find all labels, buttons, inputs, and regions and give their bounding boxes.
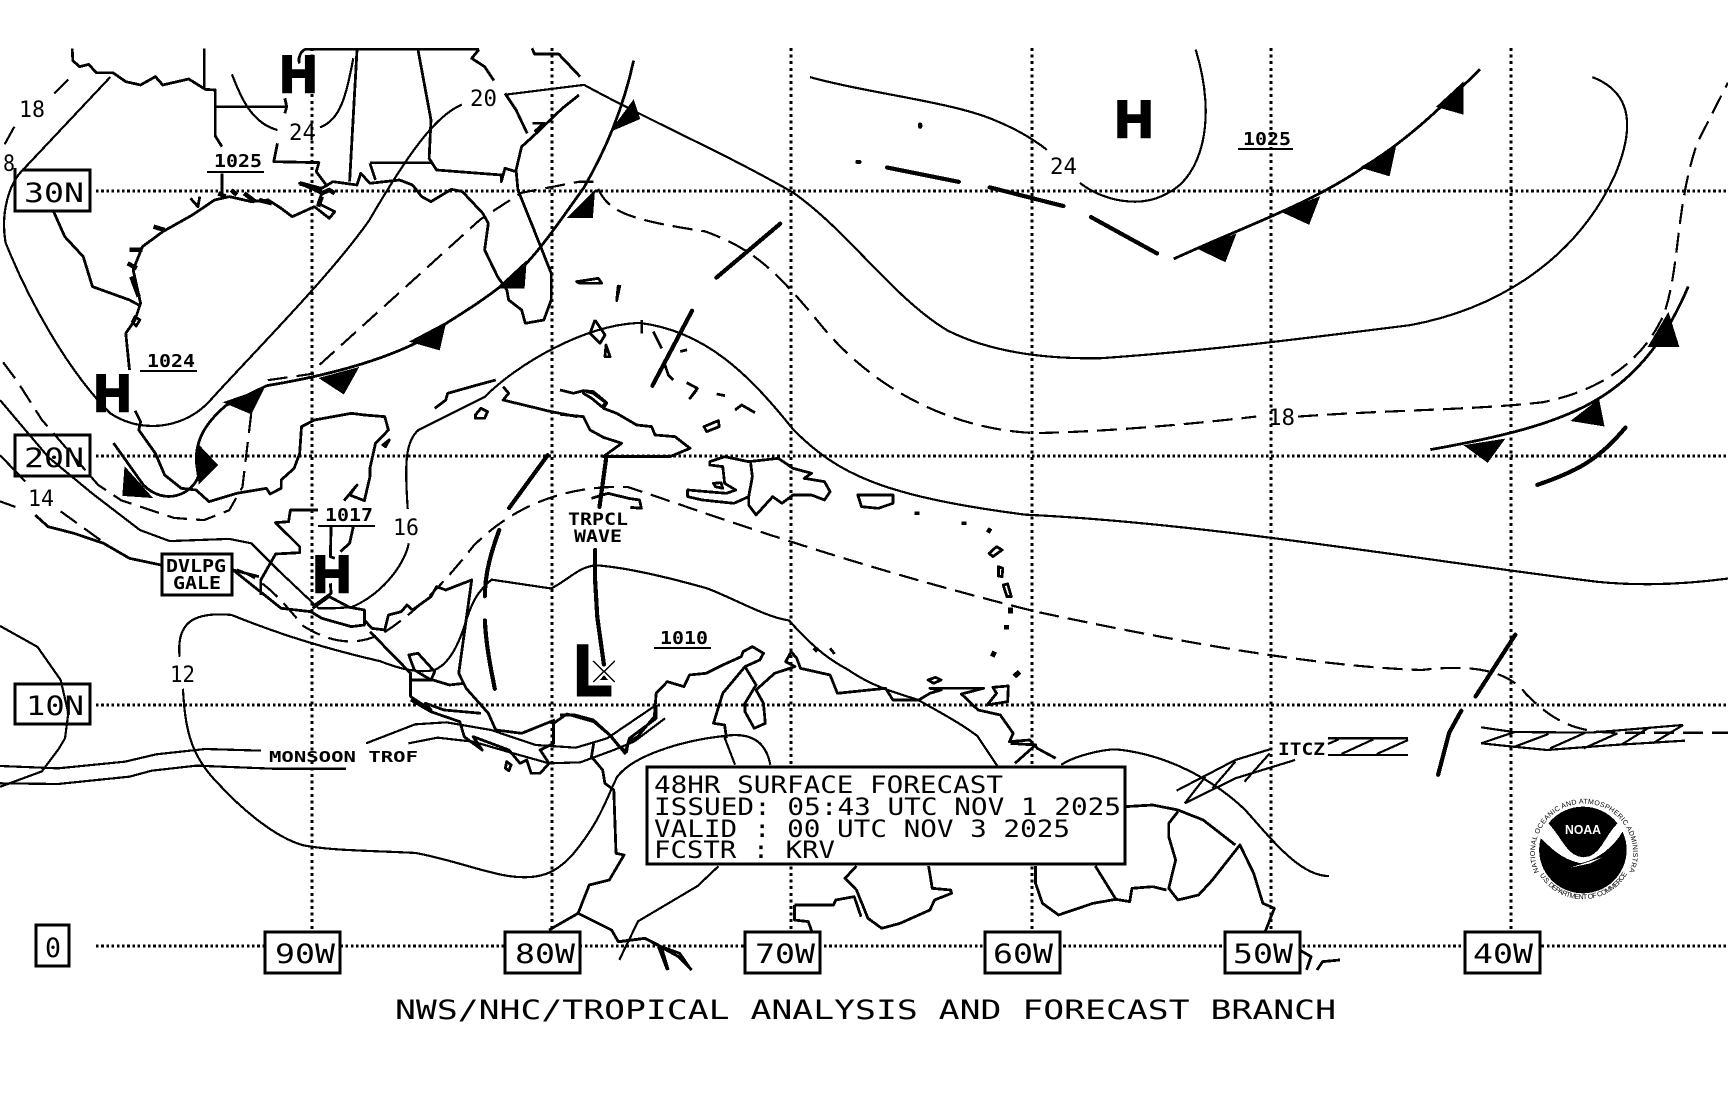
forecast info box: ISSUED: 05:43 UTC NOV 1 2025 <box>654 793 1121 821</box>
longitude labels: 80W <box>515 939 576 970</box>
cold front west <box>114 61 640 498</box>
isobar 18 dashed <box>0 79 1728 520</box>
tropical wave label <box>568 510 628 547</box>
forecast info box: VALID : 00 UTC NOV 3 2025 <box>654 815 1070 843</box>
longitude labels: 50W <box>1233 939 1294 970</box>
pressure values: 1025 <box>214 152 262 172</box>
tropical wave axis <box>595 458 606 665</box>
pressure values: 1017 <box>325 506 373 526</box>
itcz hatching <box>1177 725 1685 803</box>
isobar values: 14 <box>28 487 54 512</box>
longitude labels: 70W <box>755 939 816 970</box>
dvlpg gale box: GALE <box>173 574 221 594</box>
isobar values: 20 <box>470 87 497 112</box>
tropical wave label: TRPCL <box>568 510 628 530</box>
itcz label: ITCZ <box>1278 740 1325 760</box>
latitude labels: 20N <box>24 443 84 474</box>
longitude labels: 90W <box>275 939 336 970</box>
isobar values: 16 <box>393 516 419 541</box>
forecast info box <box>647 767 1125 864</box>
latitude and longitude grid <box>96 48 1728 946</box>
isobar 12 <box>0 565 1329 960</box>
longitude labels <box>265 932 1540 973</box>
pressure values: 1010 <box>660 629 708 649</box>
isobar 16 <box>0 323 1728 608</box>
longitude labels: 60W <box>993 939 1054 970</box>
south america <box>620 743 1340 970</box>
isobar values <box>3 87 1295 688</box>
tropical wave label: WAVE <box>574 527 622 547</box>
coastlines and political borders <box>35 48 1340 970</box>
isobar values: 24 <box>1050 155 1077 180</box>
feature labels <box>162 510 1325 766</box>
isobar values: 12 <box>170 663 195 688</box>
high pressure centers: H <box>280 46 317 104</box>
isobar 24 east <box>810 50 1206 202</box>
mexico and central america <box>35 380 577 733</box>
isobar values: 24 <box>289 121 316 146</box>
noaa logo: U.S. DEPARTMENT OF COMMERCE <box>1540 872 1627 900</box>
latitude labels: 30N <box>24 178 84 209</box>
pressure values: 1024 <box>147 352 195 372</box>
panama colombia coast <box>411 700 692 970</box>
noaa logo <box>1530 798 1638 900</box>
pressure values <box>140 130 1293 649</box>
pressure values: 1025 <box>1243 130 1291 150</box>
latitude labels: 0 <box>45 933 61 964</box>
surface troughs <box>485 125 1515 775</box>
dvlpg gale box: DVLPG <box>166 557 226 577</box>
isobar values: 8 <box>3 152 15 177</box>
high pressure centers: H <box>1115 91 1153 149</box>
monsoon trough lines <box>0 705 665 784</box>
high pressure centers: H <box>313 546 351 604</box>
latitude labels <box>15 168 90 966</box>
high pressure centers: H <box>94 365 131 423</box>
cuba bahamas and small islands <box>560 278 755 457</box>
isobar values: 18 <box>19 98 45 123</box>
dvlpg gale box <box>162 554 232 595</box>
noaa logo: NATIONAL OCEANIC AND ATMOSPHERIC ADMINISTRATION <box>1530 798 1638 874</box>
monsoon trough label: MONSOON TROF <box>269 748 418 766</box>
hispaniola puerto rico lesser antilles and south america north coast <box>560 457 1056 758</box>
forecast info box: 48HR SURFACE FORECAST <box>654 771 1003 799</box>
north america coast <box>54 48 580 370</box>
isobar 24 west <box>232 58 353 130</box>
noaa logo: NOAA <box>1565 822 1602 837</box>
forecast info box: FCSTR : KRV <box>654 836 835 864</box>
low pressure symbol: L <box>574 632 612 711</box>
latitude labels: 10N <box>26 691 84 722</box>
isobar 20 <box>4 77 1627 426</box>
isobar values: 18 <box>1268 406 1295 431</box>
storm x marker <box>593 661 615 682</box>
longitude labels: 40W <box>1473 939 1534 970</box>
footer credit: NWS/NHC/TROPICAL ANALYSIS AND FORECAST BRANCH <box>395 995 1336 1026</box>
cold front east <box>1174 69 1480 262</box>
high pressure centers <box>94 46 1153 604</box>
isobar 16 dashed and 14 dashed <box>0 487 1728 733</box>
cold front far east <box>1430 287 1688 485</box>
